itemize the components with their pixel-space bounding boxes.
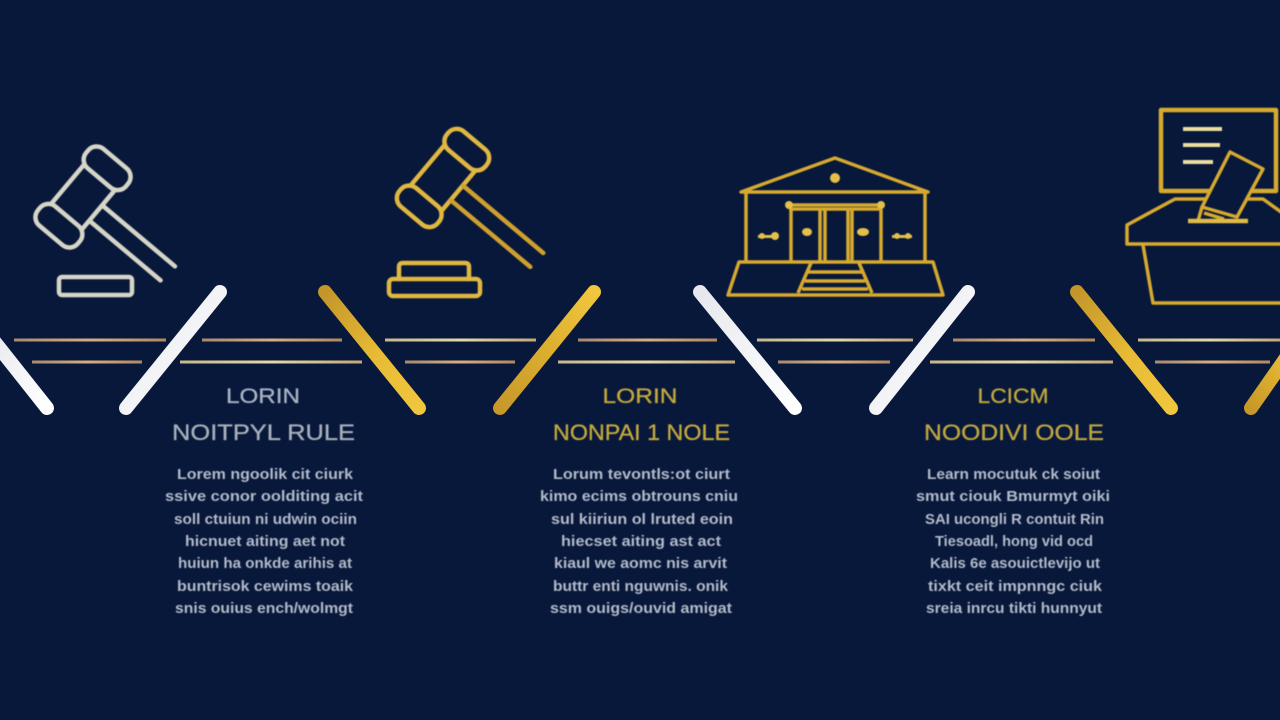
box lid: [1127, 199, 1280, 244]
text block: column 3: Tiesoadl, hong vid ocd: [935, 534, 1093, 550]
box body: [1143, 245, 1280, 303]
text block: column 2: [540, 385, 738, 617]
text block: column 2: kimo ecims obtrouns cniu: [540, 489, 738, 505]
walls: [746, 192, 925, 262]
screen lines: [1183, 129, 1222, 162]
heading: column 2: LORIN: [602, 385, 678, 408]
heading: column 3: LCICM: [978, 385, 1048, 408]
text block: column 2: ssm ouigs/ouvid amigat: [550, 601, 732, 617]
timeline rails: [14, 338, 1280, 364]
text block: column 1: Lorem ngoolik cit ciurk: [177, 467, 354, 483]
icon: gold gavel: [389, 124, 570, 296]
text block: column 2: kiaul we aomc nis arvit: [554, 556, 727, 572]
text block: column 1: buntrisok cewims toaik: [177, 579, 354, 595]
text block: column 1: huiun ha onkde arihis at: [178, 556, 352, 572]
pediment: [741, 158, 928, 192]
text block: column 3: Learn mocutuk ck soiut: [927, 467, 1100, 483]
icon: silver gavel: [31, 142, 203, 309]
text block: column 3: sreia inrcu tikti hunnyut: [926, 601, 1102, 617]
text block: column 2: hiecset aiting ast act: [561, 534, 721, 550]
steps: [798, 263, 872, 293]
text block: column 2: sul kiiriun ol lruted eoin: [551, 512, 733, 528]
ornaments: [758, 173, 912, 240]
text block: column 1: ssive conor oolditing acit: [165, 489, 363, 505]
text block: column 3: NOODIVI OOLE: [924, 420, 1104, 445]
diagonal bars: [0, 292, 1280, 408]
text block: column 2: Lorum tevontls:ot ciurt: [553, 467, 730, 483]
portico: [789, 205, 881, 262]
text block: column 3: SAI ucongli R contuit Rin: [925, 512, 1104, 528]
text block: column 3: Kalis 6e asouictlevijo ut: [930, 556, 1100, 572]
text block: column 1: snis ouius ench/wolmgt: [175, 601, 353, 617]
heading: column 1: LORIN: [226, 385, 300, 408]
text block: column 3: [916, 385, 1110, 617]
text block: column 2: NONPAI 1 NOLE: [553, 420, 730, 445]
icon: ballot box and screen: [1127, 110, 1280, 303]
text block: column 1: hicnuet aiting aet not: [185, 534, 345, 550]
ballot paper: [1202, 152, 1263, 217]
paper stem: [1198, 207, 1224, 221]
text block: column 1: NOITPYL RULE: [172, 420, 355, 445]
screen: [1161, 110, 1276, 191]
text block: column 1: soll ctuiun ni udwin ociin: [174, 512, 357, 528]
text block: column 2: buttr enti nguwnis. onik: [553, 579, 729, 595]
text block: column 3: smut ciouk Bmurmyt oiki: [916, 489, 1110, 505]
text block: column 3: tixkt ceit impnngc ciuk: [928, 579, 1103, 595]
plinth: [728, 262, 943, 295]
icon: courthouse: [728, 158, 943, 295]
text block: column 1: [165, 385, 363, 617]
slot: [1188, 219, 1248, 223]
